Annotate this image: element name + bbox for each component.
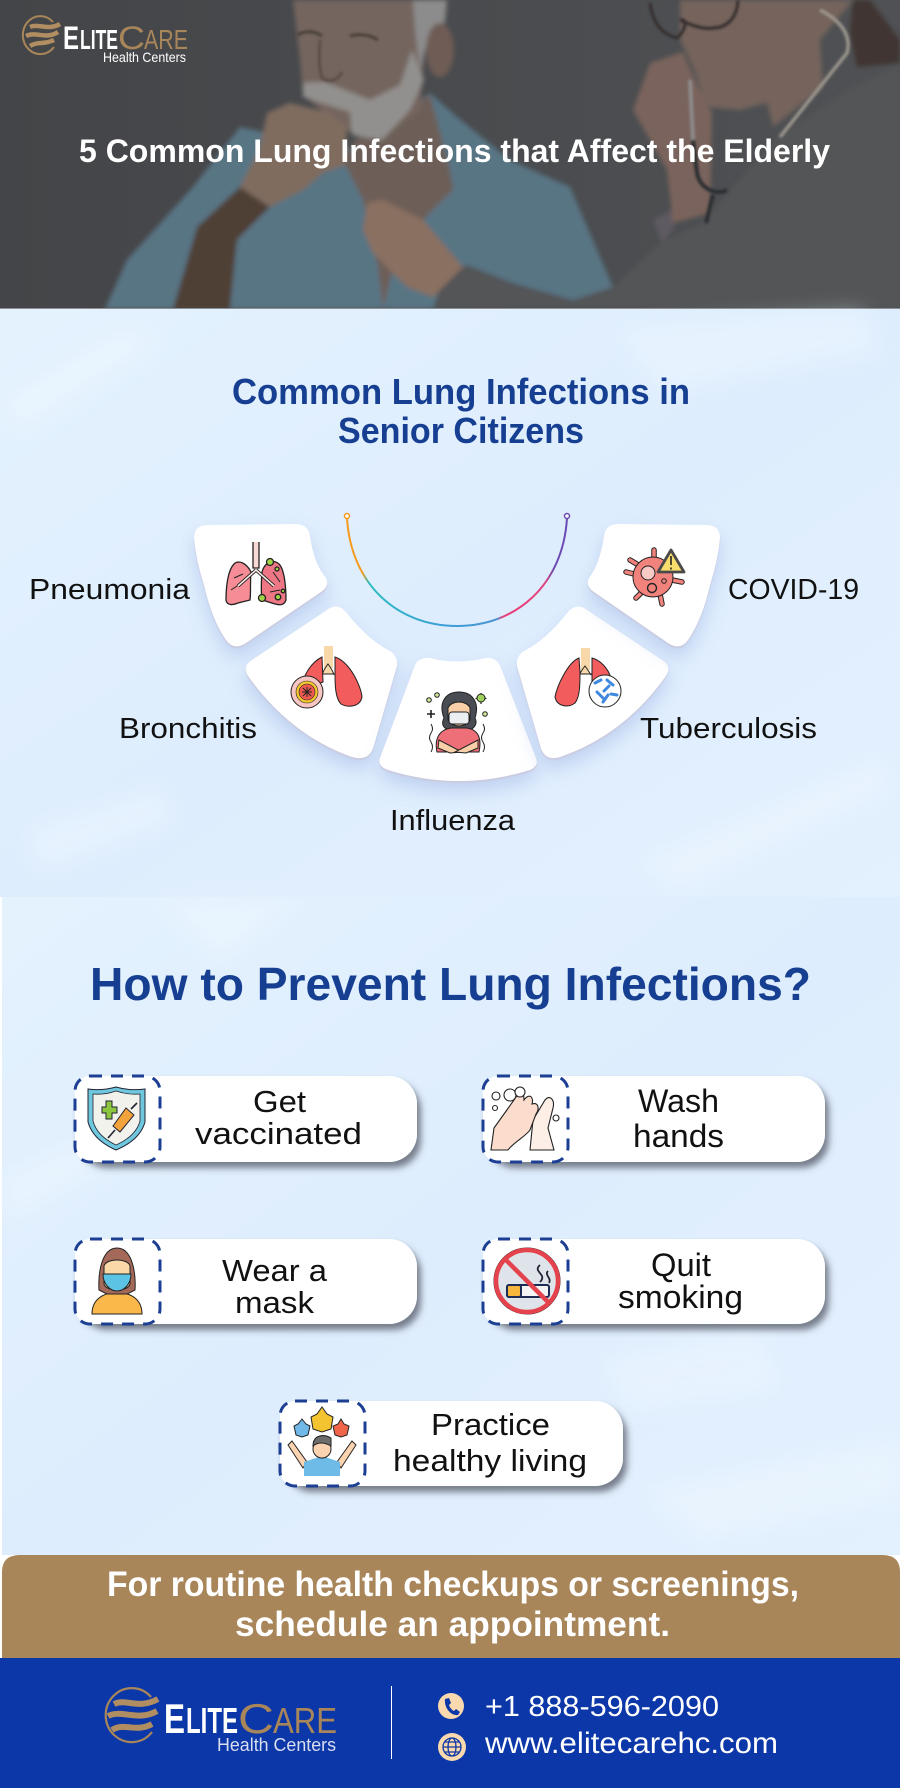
text: phone number: +1 888-596-2090 xyxy=(485,1691,719,1723)
text: wear a mask: mask xyxy=(235,1285,315,1320)
photo: man's shirt xyxy=(105,93,620,309)
photo: man's beard xyxy=(303,50,424,140)
text: wear a mask: Wear a xyxy=(222,1253,328,1288)
footer logo word elite: LITE xyxy=(186,1700,238,1741)
footer logo ring xyxy=(106,1688,152,1742)
photo: man's nose shadow xyxy=(319,40,342,80)
panel: footer xyxy=(0,1658,900,1788)
panel: header photo xyxy=(0,0,900,309)
icon: shield syringe xyxy=(88,1087,145,1150)
photo: doctor's hair xyxy=(850,0,900,67)
logo word elite xyxy=(63,20,118,56)
footer logo word care xyxy=(238,1695,337,1742)
photo: man's face xyxy=(293,0,424,140)
card: tuberculosis xyxy=(517,606,668,758)
text: quit smoking: smoking xyxy=(618,1279,743,1315)
label: covid-19: COVID-19 xyxy=(728,574,859,606)
text: get vaccinated xyxy=(195,1084,362,1151)
logo word care: C xyxy=(118,20,145,56)
icon: influenza woman xyxy=(427,692,487,753)
footer logo word care: ARE xyxy=(273,1700,337,1741)
label: pneumonia: Pneumonia xyxy=(29,574,191,606)
text: get vaccinated: Get xyxy=(253,1084,306,1119)
text: wash hands: Wash xyxy=(638,1083,719,1119)
logo word care xyxy=(118,20,188,56)
footer logo waves xyxy=(108,1699,158,1730)
icon: happy man with stars xyxy=(288,1407,356,1476)
arc diagram xyxy=(344,514,570,626)
section heading: How to Prevent Lung Infections? xyxy=(90,958,811,1010)
pill: wear a mask xyxy=(75,1239,417,1324)
text: wash hands xyxy=(633,1083,724,1154)
footer logo word care: C xyxy=(238,1695,274,1742)
panel: prevention xyxy=(0,897,900,1555)
call to action text: For routine health checkups or screenings, xyxy=(107,1565,799,1604)
photo: stethoscope light tube xyxy=(780,10,848,137)
logo ring xyxy=(23,16,54,54)
icon: woman with mask xyxy=(92,1248,142,1314)
card: bronchitis xyxy=(246,606,397,758)
photo: doctor's sleeve xyxy=(654,212,674,240)
title: 5 Common Lung Infections that Affect the Elderly xyxy=(79,133,830,169)
photo: doctor's coat xyxy=(432,214,714,308)
card: influenza xyxy=(379,658,537,781)
photo: doctor's face xyxy=(680,0,853,127)
text: wash hands: hands xyxy=(633,1118,724,1154)
card: covid-19 xyxy=(588,524,720,646)
text: wear a mask xyxy=(222,1253,328,1320)
photo: stethoscope chest piece tube xyxy=(693,140,727,223)
card: pneumonia xyxy=(194,524,327,646)
photo: doctor's hand xyxy=(363,200,463,297)
text: practice healthy living xyxy=(393,1407,587,1478)
logo: footer xyxy=(106,1688,337,1755)
footer logo word elite xyxy=(164,1695,238,1742)
pill: practice healthy living xyxy=(280,1401,623,1486)
photo: man's forearm xyxy=(173,187,270,309)
text: get vaccinated: vaccinated xyxy=(195,1116,362,1151)
footer logo tagline: Health Centers xyxy=(217,1735,336,1755)
label: bronchitis: Bronchitis xyxy=(119,713,257,745)
text: practice healthy living: Practice xyxy=(431,1407,550,1442)
photo: man's eyes and brows xyxy=(297,32,378,40)
panel: call to action xyxy=(2,1555,900,1658)
text: practice healthy living: healthy living xyxy=(393,1443,587,1478)
icon: phone xyxy=(438,1693,464,1719)
icon: tuberculosis lungs xyxy=(555,648,621,707)
icon: washing hands xyxy=(491,1087,559,1150)
pill: wash hands xyxy=(483,1076,825,1162)
photo: man's ear xyxy=(426,23,454,77)
photo: doctor's raised hand xyxy=(633,52,712,223)
photo: man's fist xyxy=(240,103,347,207)
pill: get vaccinated xyxy=(75,1076,417,1162)
call to action text xyxy=(107,1565,799,1644)
label: tuberculosis: Tuberculosis xyxy=(640,713,817,745)
footer logo word elite: E xyxy=(164,1695,185,1742)
icon: pneumonia lungs xyxy=(226,542,286,605)
call to action text: schedule an appointment. xyxy=(235,1605,670,1644)
logo: header xyxy=(23,16,188,65)
photo: man's hair xyxy=(413,0,447,70)
photo: stethoscope dark tube xyxy=(690,80,693,140)
section heading: Senior Citizens xyxy=(338,410,584,451)
icon: no smoking xyxy=(494,1248,560,1314)
icon: globe xyxy=(438,1733,466,1761)
text: quit smoking xyxy=(618,1247,743,1315)
text: website: www.elitecarehc.com xyxy=(484,1727,778,1760)
photo: man's chest xyxy=(343,95,453,309)
logo waves xyxy=(26,24,60,46)
panel: common lung infections xyxy=(0,309,900,897)
logo word care: ARE xyxy=(144,24,188,55)
text: quit smoking: Quit xyxy=(651,1247,711,1283)
photo: doctor's glasses xyxy=(650,0,738,38)
icon: covid virus xyxy=(626,550,684,604)
logo tagline: Health Centers xyxy=(103,49,186,65)
section heading xyxy=(232,371,690,451)
label: influenza: Influenza xyxy=(390,805,516,837)
icon: bronchitis lungs xyxy=(291,646,362,708)
pill: quit smoking xyxy=(483,1239,825,1324)
logo word elite: E xyxy=(63,20,79,56)
logo word elite: LITE xyxy=(80,24,118,55)
section heading: Common Lung Infections in xyxy=(232,371,690,412)
